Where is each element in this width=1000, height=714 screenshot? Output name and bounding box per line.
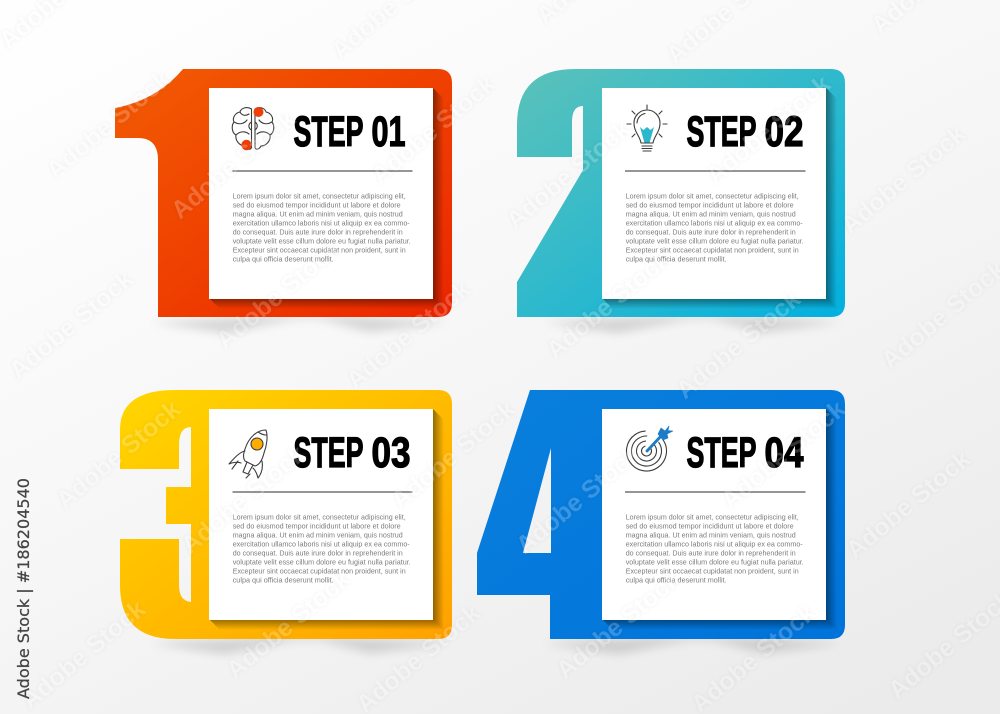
- icon: target with arrow: [619, 423, 674, 479]
- watermark: repeated Adobe Stock marks: Adobe Stock: [221, 565, 356, 685]
- body text: Lorem ipsum dolor sit amet, consectetur adipiscing elit,: [626, 192, 799, 200]
- body text: culpa qui officia deserunt mollit.: [233, 576, 334, 584]
- watermark: repeated Adobe Stock marks: Adobe Stock: [211, 235, 346, 355]
- panel: step 02: [602, 88, 837, 309]
- body text: sed do eiusmod tempor incididunt ut labore et dolore: [233, 200, 401, 210]
- number 2 shape: teal: [517, 69, 845, 317]
- body text: culpa qui officia deserunt mollit.: [233, 254, 334, 264]
- card shadow: [209, 409, 444, 630]
- icon: brain: [232, 107, 274, 150]
- card: [209, 409, 433, 620]
- watermark: repeated Adobe Stock marks: Adobe Stock: [41, 65, 176, 185]
- body text: magna aliqua. Ut enim ad minim veniam, quis nostrud: [233, 210, 403, 218]
- heading: STEP: [294, 429, 364, 477]
- body text: voluptate velit esse cillum dolore eu fugiat nulla pariatur.: [626, 558, 804, 566]
- body text: Excepteur sint occaecat cupidatat non proident, sunt in: [233, 246, 406, 254]
- number 3 shape: yellow: [120, 390, 452, 639]
- divider: [625, 491, 806, 493]
- body text: sed do eiusmod tempor incididunt ut labore et dolore: [626, 522, 794, 530]
- body text: sed do eiusmod tempor incididunt ut labore et dolore: [233, 522, 401, 530]
- card shadow: [602, 409, 837, 630]
- body text: Excepteur sint occaecat cupidatat non proident, sunt in: [626, 566, 799, 576]
- body text: do consequat. Duis aute irure dolor in reprehenderit in: [626, 228, 796, 236]
- card shadow: [209, 88, 444, 309]
- body text: culpa qui officia deserunt mollit.: [626, 576, 727, 584]
- divider: [232, 491, 412, 493]
- body text: voluptate velit esse cillum dolore eu fugiat nulla pariatur.: [626, 236, 804, 246]
- body text: Lorem ipsum dolor sit amet, consectetur adipiscing elit,: [233, 512, 406, 522]
- watermark: repeated Adobe Stock marks: Adobe Stock: [166, 105, 301, 225]
- body text: do consequat. Duis aute irure dolor in reprehenderit in: [626, 548, 796, 558]
- card shadow: [602, 88, 837, 309]
- watermark: repeated Adobe Stock marks: Adobe Stock: [16, 595, 151, 714]
- panel: step 01: [209, 88, 444, 309]
- icon: light bulb: [627, 105, 667, 151]
- body text: magna aliqua. Ut enim ad minim veniam, quis nostrud: [626, 530, 796, 540]
- body text: [626, 512, 804, 584]
- watermark: repeated Adobe Stock marks: Adobe Stock: [511, 440, 646, 560]
- body text: voluptate velit esse cillum dolore eu fugiat nulla pariatur.: [233, 558, 411, 566]
- divider: [232, 170, 412, 172]
- watermark: repeated Adobe Stock marks: Adobe Stock: [501, 115, 636, 235]
- heading: 03: [372, 429, 410, 477]
- body text: magna aliqua. Ut enim ad minim veniam, quis nostrud: [626, 210, 796, 218]
- body text: do consequat. Duis aute irure dolor in reprehenderit in: [233, 548, 403, 558]
- body text: [233, 512, 411, 584]
- body text: exercitation ullamco laboris nisi ut aliquip ex ea commo-: [626, 540, 803, 548]
- body text: voluptate velit esse cillum dolore eu fugiat nulla pariatur.: [233, 236, 411, 246]
- heading: STEP: [294, 108, 364, 156]
- body text: exercitation ullamco laboris nisi ut aliquip ex ea commo-: [233, 218, 410, 228]
- watermark: repeated Adobe Stock marks: Adobe Stock: [176, 440, 311, 560]
- heading: 02: [764, 108, 804, 156]
- icon: rocket: [229, 430, 267, 478]
- body text: Excepteur sint occaecat cupidatat non proident, sunt in: [626, 246, 799, 254]
- watermark: repeated Adobe Stock marks: Adobe Stock: [366, 70, 501, 190]
- side credit text: Adobe Stock | #186204540: [14, 478, 33, 699]
- heading: STEP: [686, 429, 756, 477]
- watermark: repeated Adobe Stock marks: Adobe Stock: [51, 395, 186, 515]
- watermark: repeated Adobe Stock marks: Adobe Stock: [671, 285, 806, 405]
- body text: Lorem ipsum dolor sit amet, consectetur adipiscing elit,: [626, 512, 799, 522]
- divider: [625, 170, 806, 172]
- heading: 04: [764, 429, 804, 477]
- watermark: repeated Adobe Stock marks: Adobe Stock: [716, 395, 851, 515]
- body text: do consequat. Duis aute irure dolor in reprehenderit in: [233, 228, 403, 236]
- watermark: repeated Adobe Stock marks: Adobe Stock: [4, 265, 139, 385]
- card: [602, 409, 826, 620]
- body text: exercitation ullamco laboris nisi ut aliquip ex ea commo-: [626, 218, 803, 228]
- number 1 shape: red: [115, 69, 452, 317]
- body text: culpa qui officia deserunt mollit.: [626, 254, 727, 264]
- panel: step 03: [209, 409, 444, 630]
- watermark: repeated Adobe Stock marks: Adobe Stock: [541, 245, 676, 365]
- watermark: repeated Adobe Stock marks: Adobe Stock: [836, 120, 971, 240]
- heading: STEP: [686, 108, 756, 156]
- watermark: repeated Adobe Stock marks: Adobe Stock: [701, 70, 836, 190]
- watermark: repeated Adobe Stock marks: Adobe Stock: [841, 445, 976, 565]
- watermark: repeated Adobe Stock marks: Adobe Stock: [341, 275, 476, 395]
- ground shadows under panels: [150, 315, 843, 654]
- number 4 shape: blue: [477, 390, 845, 639]
- heading: 01: [372, 108, 406, 156]
- body text: sed do eiusmod tempor incididunt ut labore et dolore: [626, 200, 794, 210]
- body text: [233, 192, 411, 264]
- body text: exercitation ullamco laboris nisi ut aliquip ex ea commo-: [233, 540, 410, 548]
- card: [209, 88, 433, 299]
- panel: step 04: [602, 409, 837, 630]
- body text: Lorem ipsum dolor sit amet, consectetur adipiscing elit,: [233, 192, 406, 200]
- watermark: repeated Adobe Stock marks: Adobe Stock: [551, 565, 686, 685]
- watermark: repeated Adobe Stock marks: Adobe Stock: [386, 395, 521, 515]
- body text: Excepteur sint occaecat cupidatat non proident, sunt in: [233, 566, 406, 576]
- body text: magna aliqua. Ut enim ad minim veniam, quis nostrud: [233, 530, 403, 540]
- card: [602, 88, 826, 299]
- body text: [626, 192, 804, 264]
